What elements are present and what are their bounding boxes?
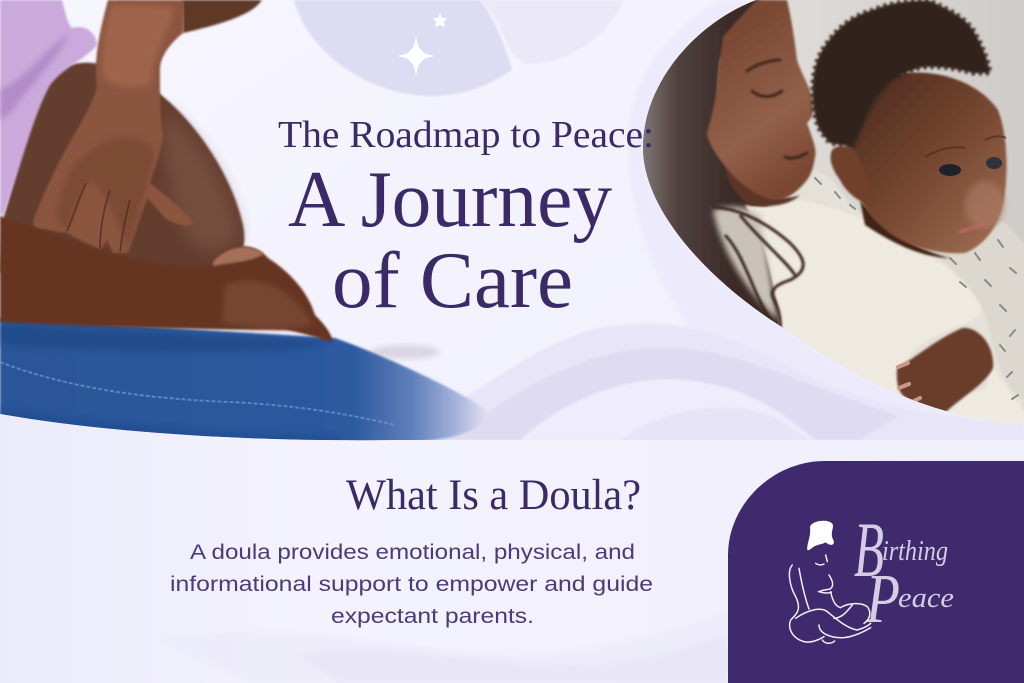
- jeans fold shading: [0, 324, 330, 352]
- top forearm: [183, 0, 262, 33]
- jeans lower shade: [0, 408, 340, 445]
- mother face: [707, 0, 816, 200]
- logo icon: seated pregnant figure: [789, 521, 871, 643]
- shirt: [0, 0, 97, 216]
- title line: of Care: of Care: [332, 237, 573, 325]
- baby hair: [813, 1, 990, 147]
- logo wordmark: Birthing: irthing: [882, 536, 948, 567]
- title line: subtitle: The Roadmap to Peace:: [278, 114, 654, 156]
- baby brow: [925, 136, 1006, 157]
- sweater collar under hair: [713, 207, 778, 320]
- baby neck shadow: [860, 200, 950, 258]
- baby clothing back: [802, 172, 1024, 410]
- logo wordmark: Peace: eace: [898, 583, 954, 614]
- baby face: [848, 73, 1006, 253]
- photo: pregnant belly with hands: [0, 0, 490, 445]
- belly highlight: [164, 110, 238, 251]
- baby clothing print: [815, 178, 1018, 399]
- arm highlight: [102, 5, 175, 87]
- mother sweater: [745, 200, 1024, 430]
- jeans: [0, 318, 490, 442]
- baby eyes: [939, 164, 961, 176]
- lower wave decoration: [160, 610, 728, 683]
- lower arm: [0, 216, 332, 342]
- mother hair: [643, 0, 784, 329]
- upper arm and hand: [33, 0, 193, 253]
- top decorative lavender blob: [294, 0, 625, 96]
- body text: [170, 541, 653, 628]
- title: [278, 114, 654, 325]
- baby fingernails: [898, 363, 920, 402]
- finger dividers: [67, 183, 130, 252]
- mother brow, eye and lips: [747, 60, 807, 158]
- lower hand highlight: [213, 247, 264, 266]
- mother curls: [713, 207, 803, 335]
- photo: mother holding baby: [640, 0, 1024, 430]
- title line: A Journey: A Journey: [288, 156, 612, 244]
- finger shading: [57, 137, 155, 250]
- baby cheek highlight: [965, 181, 1005, 229]
- wall background: [640, 0, 1024, 430]
- icon: large sparkle: [397, 36, 435, 76]
- baby mouth: [960, 223, 988, 232]
- mother neck: [725, 167, 800, 208]
- soft floor shadow: [370, 345, 440, 359]
- wave decoration: [380, 324, 1024, 442]
- logo wordmark: Birthing: B: [854, 506, 884, 593]
- heading: What Is a Doula?: What Is a Doula?: [346, 472, 641, 519]
- swoosh band behind right photo: [629, 0, 1024, 442]
- jeans seam: [0, 362, 395, 425]
- body text: expectant parents.: [331, 605, 534, 628]
- body text: informational support to empower and guide: [170, 573, 653, 596]
- icon: small star: [432, 13, 448, 27]
- baby hand: [897, 328, 993, 414]
- body text: A doula provides emotional, physical, and: [190, 541, 635, 564]
- belly: [0, 63, 244, 272]
- lower section background: [0, 414, 1024, 683]
- baby sleeve: [942, 225, 1022, 396]
- baby ear: [831, 146, 869, 203]
- panel: logo: [728, 461, 1024, 683]
- logo wordmark: Peace: P: [865, 561, 900, 638]
- shirt folds: [0, 32, 70, 120]
